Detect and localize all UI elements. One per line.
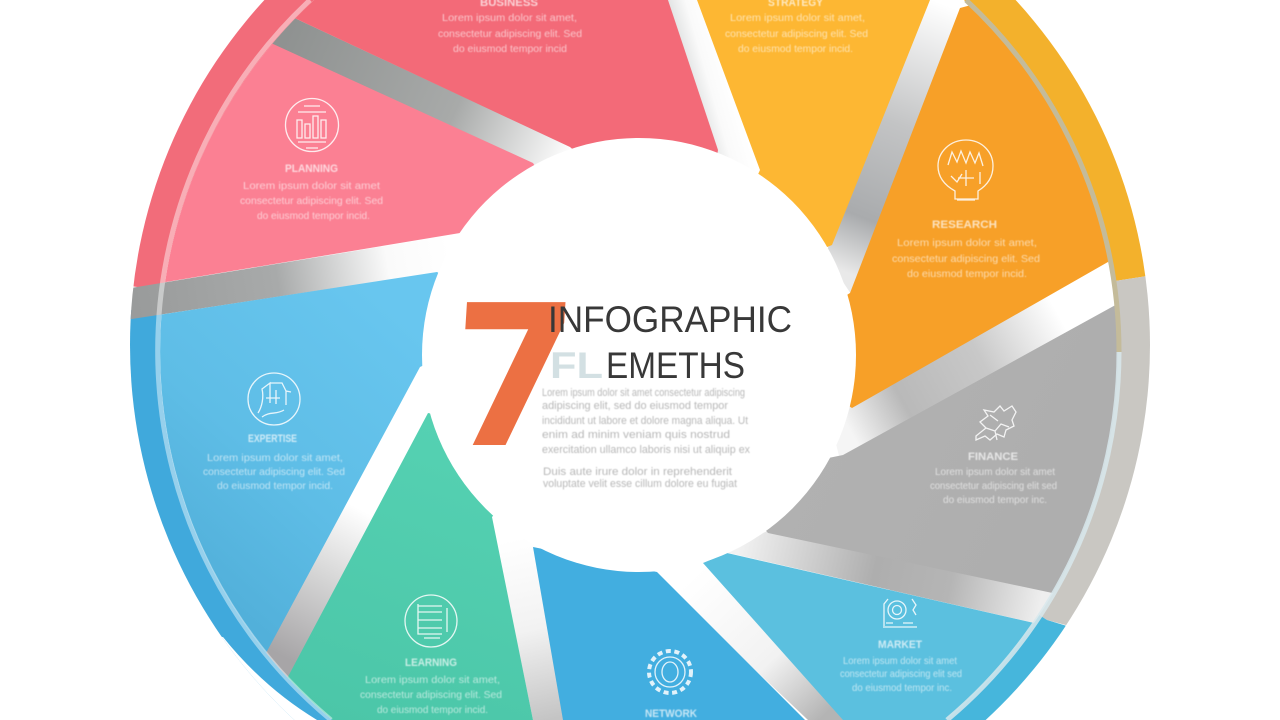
panel text: gray: [930, 451, 1057, 506]
icon: orange bulb head: [938, 140, 993, 200]
icon: gray network cluster: [976, 406, 1016, 440]
panel text: green: LEARNING: [405, 657, 457, 669]
panel text: orange: [892, 219, 1040, 280]
number seven: 7: [443, 264, 582, 492]
center paragraph: enim ad minim veniam quis nostrud: [542, 429, 730, 441]
panel text: green: do eiusmod tempor incid.: [377, 704, 488, 716]
panel text: dark blue: NETWORK: [645, 708, 697, 720]
title: EMETHS: [606, 345, 745, 386]
panel text: light blue: Lorem ipsum dolor sit amet: [843, 655, 957, 667]
panel text: green: [360, 657, 502, 716]
panel text: light blue: do eiusmod tempor inc.: [852, 682, 952, 694]
panel text: pink: do eiusmod tempor incid.: [257, 210, 370, 222]
panel text: orange: Lorem ipsum dolor sit amet,: [897, 237, 1037, 249]
center white circle: [422, 138, 856, 572]
panel text: pink: Lorem ipsum dolor sit amet: [243, 180, 380, 192]
panel text: gray: FINANCE: [968, 451, 1018, 463]
icon: green round document: [405, 595, 457, 647]
panel text: top red: do eiusmod tempor incid: [453, 43, 567, 55]
panel text: yellow: consectetur adipiscing elit. Sed: [725, 28, 868, 40]
panel text: yellow: Lorem ipsum dolor sit amet,: [730, 12, 865, 24]
title: INFOGRAPHIC: [548, 299, 792, 340]
panel: orange: [847, 6, 1108, 408]
center paragraph: adipiscing elit, sed do eiusmod tempor: [542, 400, 728, 412]
panel text: pink: PLANNING: [285, 163, 338, 175]
panel: dark blue: [533, 547, 805, 720]
panel text: gray: do eiusmod tempor inc.: [943, 494, 1047, 506]
panel: top red: [296, 0, 718, 153]
panel text: top red: [438, 0, 582, 55]
center paragraph: [542, 387, 750, 490]
panel text: blue: [203, 433, 345, 492]
panel text: blue: consectetur adipiscing elit. Sed: [203, 466, 345, 478]
gray fold bands: [266, 0, 1056, 720]
panel: gray: [766, 306, 1118, 593]
panel text: yellow: do eiusmod tempor incid.: [738, 43, 853, 55]
title: FL: [550, 345, 603, 386]
center paragraph: Lorem ipsum dolor sit amet consectetur adipiscing: [542, 387, 745, 399]
panel text: blue: Lorem ipsum dolor sit amet,: [207, 452, 343, 464]
panel text: blue: do eiusmod tempor incid.: [217, 480, 333, 492]
center paragraph: voluptate velit esse cillum dolore eu fugiat: [543, 478, 737, 490]
panel text: top red: Lorem ipsum dolor sit amet,: [442, 12, 577, 24]
panel: blue: [160, 272, 438, 653]
panel: light blue: [703, 553, 1034, 720]
panel: pink: [165, 44, 534, 282]
panel text: top red: consectetur adipiscing elit. Sed: [438, 28, 582, 40]
title: [548, 299, 792, 386]
panel text: light blue: MARKET: [878, 639, 922, 651]
icon: blue round figure: [248, 373, 300, 425]
icon: dark blue gear: [649, 651, 691, 693]
center paragraph: exercitation ullamco laboris nisi ut aliquip ex: [542, 444, 750, 456]
infographic wheel: [130, 0, 1150, 720]
panel text: yellow: [725, 0, 868, 55]
panel text: gray: Lorem ipsum dolor sit amet: [935, 466, 1055, 478]
panel text: green: Lorem ipsum dolor sit amet,: [365, 674, 500, 686]
panel text: gray: consectetur adipiscing elit sed: [930, 480, 1057, 492]
panel text: pink: consectetur adipiscing elit. Sed: [240, 195, 383, 207]
panel text: orange: do eiusmod tempor incid.: [907, 268, 1027, 280]
band between pink and blue panels: [130, 247, 386, 320]
panel text: blue: EXPERTISE: [248, 433, 297, 445]
panel text: green: consectetur adipiscing elit. Sed: [360, 689, 502, 701]
center paragraph: incididunt ut labore et dolore magna aliqua. Ut: [542, 415, 748, 427]
panel text: light blue: consectetur adipiscing elit sed: [840, 668, 962, 680]
center paragraph: Duis aute irure dolor in reprehenderit: [543, 466, 732, 478]
panel text: orange: RESEARCH: [932, 219, 997, 231]
panel text: orange: consectetur adipiscing elit. Sed: [892, 253, 1040, 265]
panel: yellow: [697, 0, 930, 247]
glass ring: [158, 0, 1119, 720]
panel text: light blue: [840, 639, 962, 694]
panel text: pink: [240, 163, 383, 222]
icon: pink round chart: [286, 98, 338, 152]
panel: green: [288, 413, 533, 720]
icon: light blue machine: [883, 599, 917, 627]
